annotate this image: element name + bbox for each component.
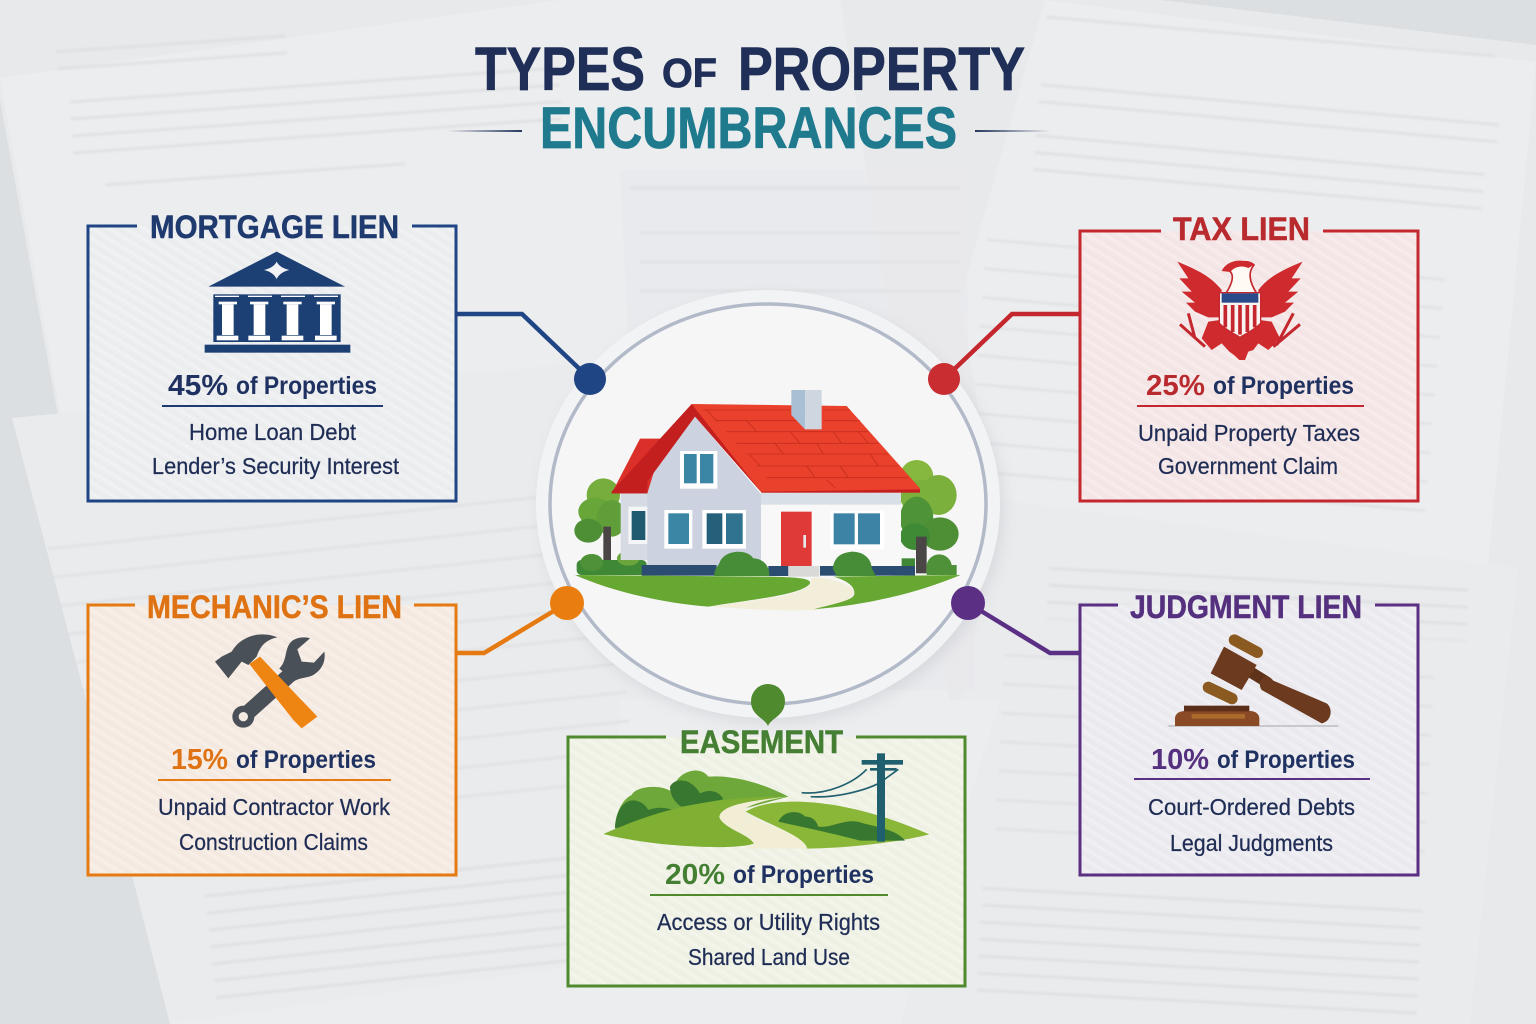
house illustration xyxy=(574,390,961,610)
statistic: of Properties xyxy=(236,372,377,400)
statistic xyxy=(168,370,377,402)
description: Access or Utility Rights xyxy=(657,909,880,935)
foundation xyxy=(642,565,915,576)
chimney xyxy=(791,390,822,429)
door xyxy=(781,512,812,566)
statistic: 20% xyxy=(665,859,725,891)
title xyxy=(475,35,1025,161)
connector: tax xyxy=(944,314,1080,379)
statistic xyxy=(1146,370,1354,402)
connector: mechanic xyxy=(456,603,567,653)
description: Unpaid Property Taxes xyxy=(1138,420,1360,446)
heading: EASEMENT xyxy=(680,724,843,760)
description: Home Loan Debt xyxy=(189,419,357,445)
description xyxy=(1138,420,1360,479)
connector: judgment xyxy=(968,603,1080,653)
description: Shared Land Use xyxy=(688,944,850,970)
side window xyxy=(628,507,647,544)
main roof xyxy=(692,404,920,493)
lawn right xyxy=(813,575,961,609)
node: judgment xyxy=(951,586,985,620)
connector: mortgage xyxy=(456,314,590,379)
description: Legal Judgments xyxy=(1170,830,1333,856)
statistic: 45% xyxy=(168,370,228,402)
node: tax xyxy=(928,363,960,395)
panel: tax lien xyxy=(1080,211,1418,501)
panel: mortgage lien xyxy=(88,209,456,501)
title line 1: OF xyxy=(662,50,717,96)
statistic xyxy=(1151,744,1355,776)
side wing xyxy=(621,492,649,560)
panel: easement xyxy=(568,724,965,986)
shrubs xyxy=(714,552,876,576)
lawn left xyxy=(575,575,810,607)
description xyxy=(657,909,880,970)
heading: JUDGMENT LIEN xyxy=(1130,589,1362,625)
icon: hammer and wrench xyxy=(215,634,325,728)
right tree xyxy=(900,460,959,575)
description xyxy=(158,794,390,855)
description: Lender’s Security Interest xyxy=(152,453,400,479)
title line 1: PROPERTY xyxy=(738,35,1025,103)
roof shingles xyxy=(703,410,908,488)
statistic: of Properties xyxy=(733,861,874,889)
panel: mechanic's lien xyxy=(88,589,456,875)
icon: bank xyxy=(205,252,350,353)
title line 1 xyxy=(475,35,1025,103)
step xyxy=(788,566,819,577)
panel: judgment lien xyxy=(1080,589,1418,875)
main gable wall xyxy=(647,417,762,566)
heading: MECHANIC’S LIEN xyxy=(147,589,402,625)
icon: land and utility pole xyxy=(603,753,929,849)
statistic: of Properties xyxy=(1217,746,1355,774)
node: mortgage xyxy=(574,363,606,395)
side roof xyxy=(612,439,664,493)
lower window 2 xyxy=(702,510,746,549)
icon: gavel xyxy=(1168,640,1338,727)
description xyxy=(1148,794,1355,856)
icon: eagle xyxy=(1177,261,1303,360)
central circle xyxy=(536,290,1004,724)
description: Court-Ordered Debts xyxy=(1148,794,1355,820)
statistic xyxy=(665,859,874,891)
node: easement xyxy=(751,684,785,726)
title line 2: ENCUMBRANCES xyxy=(540,96,957,161)
heading: TAX LIEN xyxy=(1173,211,1310,247)
description: Government Claim xyxy=(1158,453,1338,479)
lower window 1 xyxy=(664,510,692,549)
statistic xyxy=(171,744,376,776)
statistic: of Properties xyxy=(1213,372,1354,400)
right window xyxy=(830,511,884,549)
statistic: 15% xyxy=(171,744,228,776)
statistic: 10% xyxy=(1151,744,1209,776)
statistic: of Properties xyxy=(236,746,376,774)
statistic: 25% xyxy=(1146,370,1205,402)
description xyxy=(152,419,400,479)
roof gable edge xyxy=(612,404,920,493)
front wall xyxy=(761,493,901,566)
path xyxy=(710,578,854,610)
node: mechanic xyxy=(550,586,584,620)
heading: MORTGAGE LIEN xyxy=(150,209,399,245)
left tree xyxy=(574,478,647,575)
upper window xyxy=(680,451,717,489)
description: Unpaid Contractor Work xyxy=(158,794,390,820)
description: Construction Claims xyxy=(179,829,368,855)
title line 1: TYPES xyxy=(475,35,645,103)
